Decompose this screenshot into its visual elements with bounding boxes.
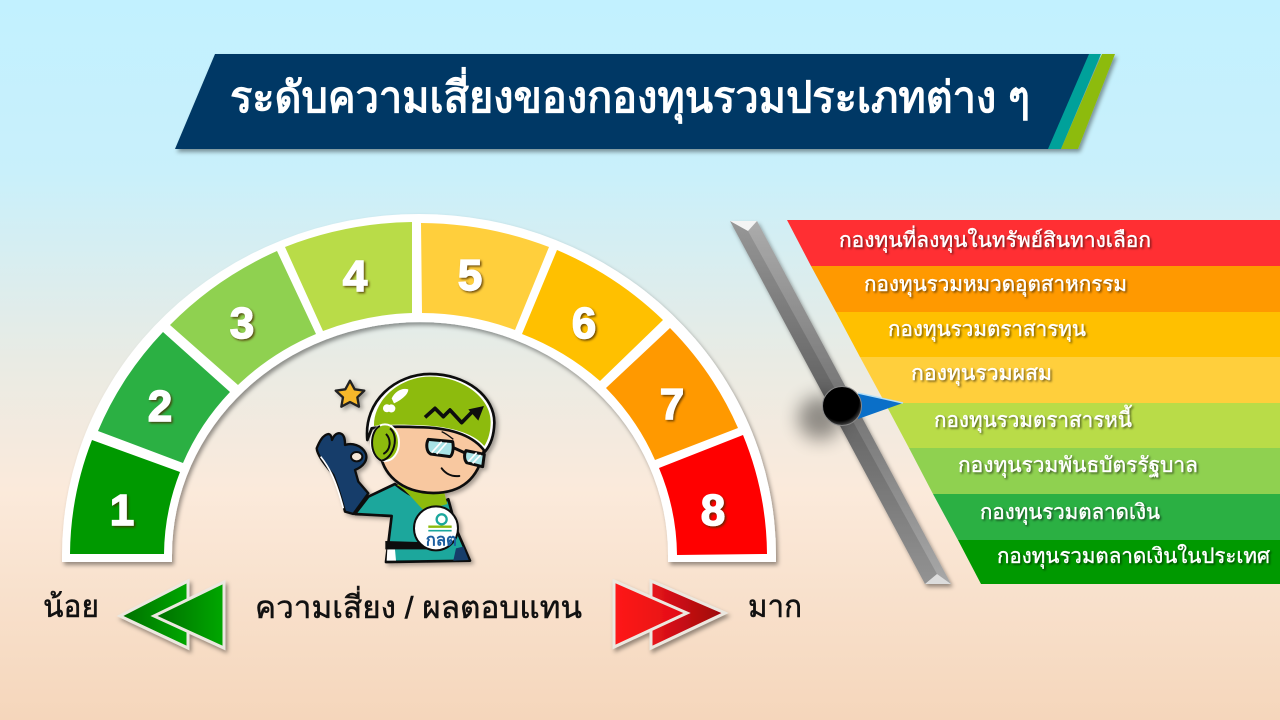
badge logo (426, 514, 457, 549)
funnel labels: กองทุนที่ลงทุนในทรัพย์สินทางเลือก (839, 225, 1151, 253)
badge (414, 506, 458, 550)
label: risk and return: ความเสี่ยง / ผลตอบแทน (255, 586, 582, 625)
gauge numbers: 5 (458, 251, 482, 300)
band 1 (787, 220, 1280, 266)
red double arrow (614, 581, 725, 648)
band 5 (885, 403, 1280, 448)
title text: ระดับความเสี่ยงของกองทุนรวมประเภทต่าง ๆ (230, 67, 1030, 125)
segment 2 (98, 332, 230, 463)
earpiece (371, 424, 399, 461)
label: low: น้อย (43, 589, 99, 624)
dark blue leg (453, 547, 469, 561)
gauge (62, 214, 776, 562)
glasses (427, 439, 484, 467)
arm and hand (317, 433, 368, 514)
gauge numbers (110, 251, 725, 535)
gauge numbers: 6 (572, 299, 596, 348)
gauge numbers: 4 (343, 252, 368, 301)
title banner (175, 54, 1115, 149)
funnel labels: กองทุนรวมตลาดเงินในประเทศ (997, 544, 1271, 569)
gauge numbers: 2 (148, 382, 172, 431)
helmet highlight (383, 389, 408, 412)
risk funnel (787, 220, 1280, 584)
helmet (367, 374, 494, 452)
helmet chart arrow (425, 406, 484, 423)
funnel labels: กองทุนรวมตลาดเงิน (980, 501, 1160, 525)
label: high: มาก (748, 589, 802, 624)
eyebrow (442, 432, 453, 439)
gauge white ring (62, 214, 776, 562)
segment 3 (170, 251, 316, 385)
head (380, 427, 484, 493)
gauge numbers: 1 (110, 486, 134, 535)
pointer (858, 393, 903, 419)
body (355, 484, 470, 562)
funnel labels: กองทุนรวมตราสารทุน (888, 318, 1086, 342)
badge logo: กลต (426, 530, 457, 549)
funnel labels: กองทุนรวมตราสารหนี้ (934, 405, 1132, 433)
band 7 (933, 494, 1280, 540)
mascot (317, 374, 494, 562)
segment 6 (522, 250, 663, 381)
band 4 (860, 357, 1280, 403)
funnel labels (839, 225, 1271, 569)
band 8 (958, 540, 1280, 584)
belt (385, 541, 440, 549)
band 2 (811, 266, 1280, 312)
segment 4 (285, 222, 412, 331)
arm highlight (321, 457, 343, 508)
segment 7 (606, 328, 738, 460)
gauge numbers: 7 (660, 380, 684, 429)
gauge numbers: 3 (230, 299, 254, 348)
segment 8 (659, 435, 767, 555)
segment 1 (70, 440, 180, 554)
funnel labels: กองทุนรวมหมวดอุตสาหกรรม (864, 273, 1127, 297)
neck (397, 484, 447, 511)
gauge numbers: 8 (701, 486, 725, 535)
funnel labels: กองทุนรวมพันธบัตรรัฐบาล (958, 454, 1198, 478)
segment 5 (421, 223, 549, 330)
band 6 (909, 448, 1280, 494)
knob (822, 386, 862, 426)
star (336, 381, 364, 407)
mouth (442, 468, 459, 476)
slider knob and pointer (798, 386, 903, 440)
band 3 (836, 312, 1280, 357)
green double arrow (120, 581, 224, 648)
slider rail (730, 221, 951, 584)
lens glare (432, 442, 481, 463)
hand hole (351, 452, 362, 461)
leg white strip (387, 549, 396, 561)
funnel labels: กองทุนรวมผสม (911, 362, 1052, 386)
